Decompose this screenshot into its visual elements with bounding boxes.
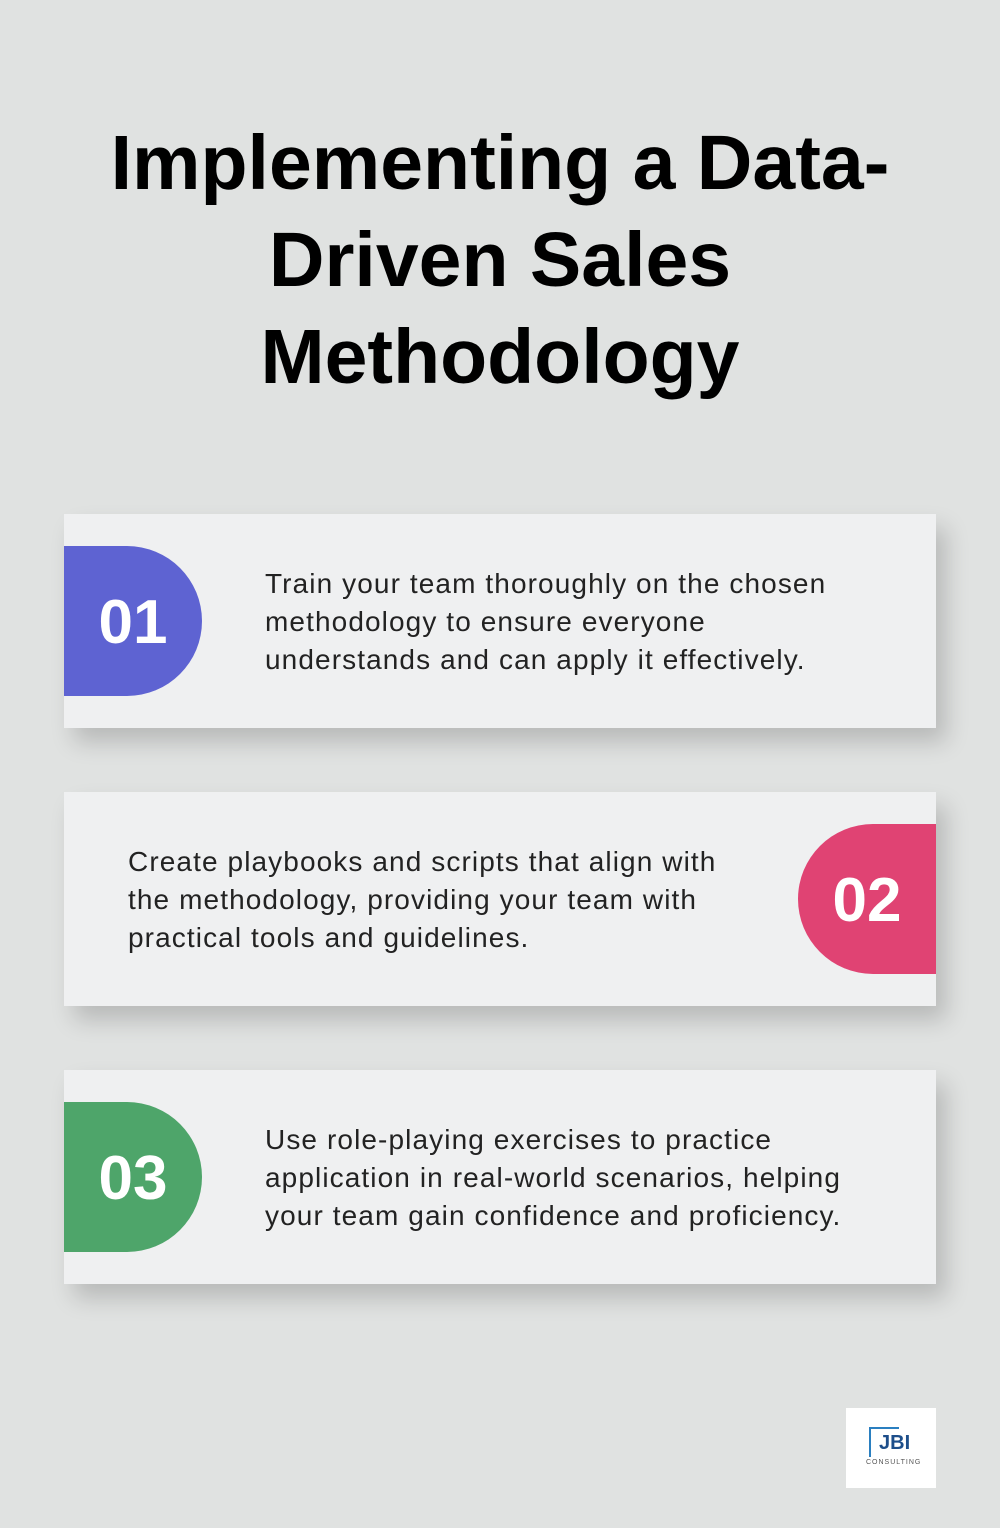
logo: JBI [879,1432,910,1454]
text 2: the methodology, providing your team with [128,884,697,915]
badge 02 [798,824,936,974]
text 3: Use role-playing exercises to practice [265,1124,772,1155]
logo: CONSULTING [866,1459,921,1466]
card 3 [64,1070,936,1284]
title: Methodology [260,314,740,400]
badge 01 [64,546,202,696]
badge 03: 03 [99,1144,167,1213]
title [111,120,889,400]
text 1: Train your team thoroughly on the chosen [265,568,826,599]
title: Implementing a Data- [111,120,889,206]
logo [846,1408,936,1488]
badge 02: 02 [833,866,901,935]
text 2 [128,846,716,953]
text 3 [265,1124,841,1231]
card 2 [64,792,936,1006]
text 1: methodology to ensure everyone [265,606,706,637]
text 1: understands and can apply it effectively. [265,644,806,675]
text 2: Create playbooks and scripts that align with [128,846,716,877]
text 2: practical tools and guidelines. [128,922,529,953]
text 1 [265,568,826,675]
badge 01: 01 [99,588,167,657]
text 3: your team gain confidence and proficiency. [265,1200,841,1231]
title: Driven Sales [269,217,731,303]
text 3: application in real-world scenarios, helping [265,1162,841,1193]
card 1 [64,514,936,728]
badge 03 [64,1102,202,1252]
